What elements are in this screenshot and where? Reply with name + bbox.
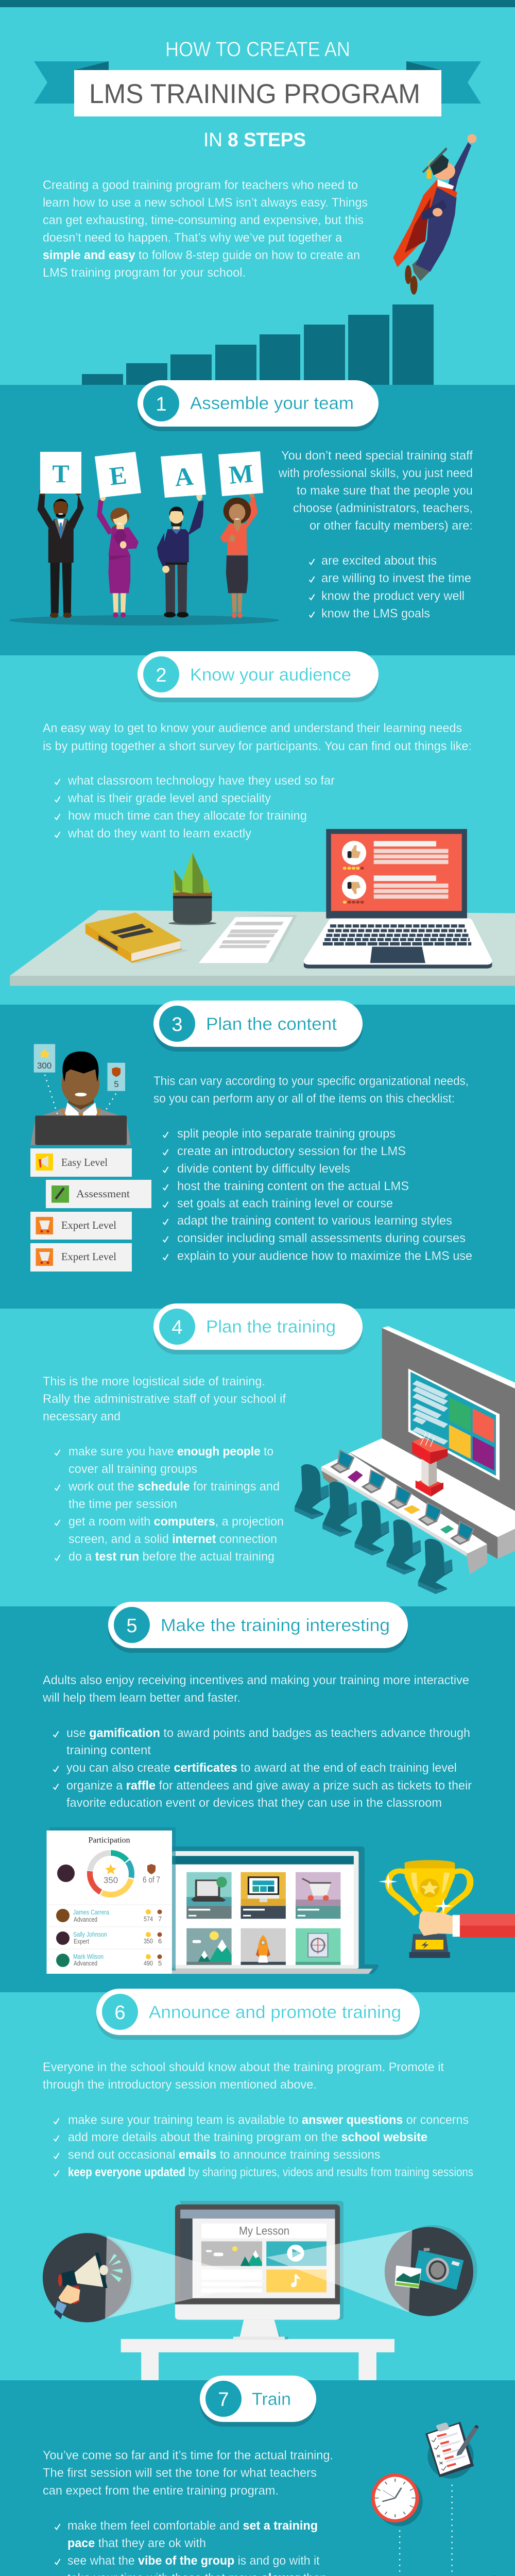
checklist: team traits: know the LMS goals	[321, 607, 430, 620]
checklist: content tasks: set goals at each training level or course	[177, 1196, 393, 1211]
checklist: team traits: know the product very well	[321, 589, 465, 603]
checklist: promotion: send out occasional emails to announce training sessions	[68, 2148, 380, 2162]
card: participation leaderboard: Advanced	[74, 1916, 97, 1923]
heading: step 5	[108, 1602, 408, 1653]
text: team description: or other faculty members) are:	[310, 519, 473, 533]
text: team description: choose (administrators, teachers,	[293, 501, 473, 515]
heading: step 3: Plan the content	[206, 1014, 337, 1034]
checklist: training	[55, 2519, 327, 2576]
chart: rising bars	[82, 304, 434, 385]
intro text: simple and easy to follow 8-step guide on how to create an	[43, 248, 360, 262]
letter cards: M	[228, 459, 254, 489]
text: team description: with professional skills, you just need	[278, 466, 473, 480]
text: audience intro: is by putting together a short survey for participants. You can find out things like:	[43, 739, 472, 753]
intro text: Creating a good training program for teachers who need to	[43, 178, 358, 192]
intro text: LMS training program for your school.	[43, 266, 246, 280]
heading: step 2: 2	[156, 665, 167, 686]
heading: step 6	[96, 1989, 420, 2040]
checklist: content tasks: explain to your audience how to maximize the LMS use	[177, 1249, 472, 1263]
heading: step 3	[153, 1001, 363, 1052]
checklist: logistics: cover all training groups	[68, 1462, 197, 1476]
heading: step 6: Announce and promote training	[149, 2003, 401, 2022]
text: content intro	[153, 1074, 469, 1106]
checklist: incentives	[54, 1726, 472, 1810]
title: HOW TO CREATE AN	[165, 38, 350, 61]
text: audience intro	[43, 721, 472, 753]
checklist: team traits	[309, 554, 471, 620]
heading: step 5: Make the training interesting	[161, 1616, 390, 1635]
course level list: Assessment	[76, 1188, 130, 1200]
heading: step 4: Plan the training	[206, 1317, 336, 1336]
checklist: promotion: add more details about the training program on the school website	[68, 2130, 427, 2144]
illustration: student with points and badges: 5	[114, 1079, 119, 1089]
text: team description: to make sure that the people you	[297, 484, 473, 498]
checklist: content tasks: host the training content on the actual LMS	[177, 1179, 409, 1193]
checklist: incentives: use gamification to award points and badges as teachers advance through	[66, 1726, 470, 1740]
card: participation leaderboard: Advanced	[74, 1959, 97, 1967]
checklist: content tasks: adapt the training content to various learning styles	[177, 1214, 452, 1228]
card: participation leaderboard: Sally Johnson	[73, 1930, 107, 1938]
checklist: survey questions: what do they want to learn exactly	[67, 827, 251, 841]
checklist: promotion: keep everyone updated by sharing pictures, videos and results from training sessions	[68, 2165, 473, 2179]
card: participation leaderboard: 6	[158, 1937, 162, 1945]
checklist: team traits: are willing to invest the time	[321, 571, 471, 585]
intro text: can get exhausting, time-consuming and expensive, but this	[43, 213, 364, 227]
checklist: promotion	[54, 2113, 473, 2179]
checklist: logistics: do a test run before the actual training	[68, 1550, 274, 1564]
card: participation leaderboard: 6 of 7	[143, 1875, 160, 1885]
course level list: Expert Level	[61, 1250, 116, 1263]
checklist: logistics: work out the schedule for trainings and	[68, 1480, 280, 1494]
intro text: learn how to use a new school LMS isn’t always easy. Things	[43, 196, 368, 210]
checklist: team traits: are excited about this	[321, 554, 437, 568]
text: incentives intro: Adults also enjoy receiving incentives and making your training more interactive	[43, 1673, 469, 1687]
checklist: incentives: you can also create certificates to award at the end of each training level	[66, 1761, 457, 1775]
checklist: training: make them feel comfortable and set a training	[67, 2519, 318, 2533]
text: promotion intro: through the introductory session mentioned above.	[43, 2078, 317, 2092]
panel: step 5 make the training interesting	[0, 1602, 515, 1993]
panel: step 6 announce and promote training	[0, 1989, 515, 2383]
card: participation leaderboard	[46, 1827, 176, 1974]
title	[34, 38, 481, 151]
checklist: logistics: the time per session	[68, 1497, 177, 1511]
illustration: flying graduate	[393, 134, 476, 295]
heading: step 1: 1	[156, 394, 167, 415]
panel: step 7 train	[0, 2376, 515, 2576]
illustration: laptop with course tiles	[172, 1846, 379, 1974]
illustration: isometric classroom	[295, 1326, 515, 1594]
checklist: survey questions: what classroom technology have they used so far	[67, 774, 335, 788]
course level list	[30, 1148, 151, 1272]
checklist: training: see what the vibe of the group is and go with it	[67, 2554, 320, 2568]
letter cards: E	[108, 460, 128, 491]
illustration: desk with book, plant, survey and laptop	[10, 829, 515, 986]
letter cards: A	[174, 462, 195, 492]
text: content intro: This can vary according to your specific organizational needs,	[153, 1074, 469, 1088]
text: incentives intro	[42, 1673, 469, 1705]
heading: step 4	[153, 1303, 363, 1354]
card: participation leaderboard: Expert	[74, 1937, 89, 1945]
text: training intro: You’ve come so far and it’s time for the actual training.	[43, 2448, 333, 2463]
letter cards	[40, 451, 263, 498]
text: incentives intro: will help them learn better and faster.	[42, 1691, 241, 1705]
card: participation leaderboard: Mark Wilson	[73, 1953, 104, 1960]
course level list: Easy Level	[61, 1156, 108, 1168]
course level list: Expert Level	[61, 1219, 116, 1231]
checklist: logistics: make sure you have enough people to	[68, 1445, 273, 1459]
text: promotion intro: Everyone in the school should know about the training program. Promote it	[43, 2060, 444, 2074]
heading: step 4: 4	[171, 1317, 183, 1338]
heading: step 1	[138, 380, 379, 431]
card: participation leaderboard: James Carrera	[73, 1908, 110, 1916]
checklist: content tasks: split people into separate training groups	[177, 1127, 396, 1141]
title: IN 8 STEPS	[203, 129, 306, 151]
heading: step 5: 5	[126, 1615, 138, 1637]
panel: step 4 plan the training	[0, 1303, 515, 1606]
heading: step 3: 3	[171, 1014, 183, 1036]
text: logistics intro: This is the more logistical side of training.	[43, 1375, 265, 1388]
text: training intro: The first session will set the tone for what teachers	[43, 2466, 317, 2480]
checklist: survey questions: how much time can they allocate for training	[68, 809, 307, 823]
text: audience intro: An easy way to get to know your audience and understand their learning needs	[43, 721, 462, 735]
checklist: content tasks: consider including small assessments during courses	[177, 1231, 466, 1245]
illustration: trophy held by hand	[379, 1860, 515, 1958]
text: team description: You don’t need special training staff	[281, 449, 473, 463]
illustration: student with points and badges	[30, 1044, 131, 1145]
panel: step 1 assemble your team	[0, 380, 515, 655]
checklist: incentives: training content	[66, 1743, 151, 1757]
illustration: desktop monitor on desk with megaphone and camera: My Lesson	[239, 2225, 289, 2237]
intro text: doesn’t need to happen. That’s why we’ve put together a	[43, 231, 342, 245]
heading: step 7	[200, 2376, 316, 2427]
letter cards: T	[52, 459, 70, 488]
chart: participation donut	[90, 1853, 132, 1895]
checklist: incentives: organize a raffle for attendees and give away a prize such as tickets to their	[66, 1778, 472, 1793]
heading: step 6: 6	[114, 2002, 126, 2024]
checklist: content tasks: create an introductory session for the LMS	[177, 1144, 406, 1158]
heading: step 2: Know your audience	[190, 665, 351, 685]
panel: header with title and intro	[0, 0, 515, 386]
heading: step 7: 7	[218, 2389, 229, 2411]
text: logistics intro	[43, 1375, 286, 1423]
illustration: team holding letter cards	[9, 451, 279, 625]
heading: step 7: Train	[252, 2389, 291, 2409]
illustration: trainer with clock, checklist, screen and audience	[249, 2422, 501, 2576]
panel: step 3 plan the content	[0, 1001, 515, 1309]
card: participation leaderboard: 7	[158, 1915, 162, 1923]
checklist: survey questions	[55, 774, 335, 841]
card: participation leaderboard: 350	[144, 1937, 153, 1945]
checklist: survey questions: what is their grade level and speciality	[67, 791, 271, 805]
text: logistics intro: necessary and	[43, 1410, 121, 1423]
checklist: promotion: make sure your training team is available to answer questions or concerns	[68, 2113, 469, 2127]
checklist: logistics: screen, and a solid internet connection	[68, 1532, 277, 1546]
checklist: logistics	[55, 1445, 284, 1564]
heading: step 1: Assemble your team	[190, 394, 354, 413]
checklist: logistics: get a room with computers, a projection	[68, 1515, 284, 1529]
text: logistics intro: Rally the administrative staff of your school if	[43, 1392, 286, 1406]
card: participation leaderboard: 574	[144, 1915, 153, 1923]
text: promotion intro	[43, 2060, 444, 2092]
card: participation leaderboard: 5	[158, 1959, 162, 1967]
ribbon banner	[34, 61, 481, 116]
checklist: training: pace that they are ok with	[67, 2536, 206, 2550]
text: content intro: so you can perform any or all of the items on this checklist:	[153, 1092, 455, 1106]
intro text	[43, 178, 368, 280]
checklist: content tasks	[163, 1127, 472, 1263]
card: participation leaderboard: Participation	[89, 1836, 130, 1844]
text: training intro: can expect from the entire training program.	[43, 2484, 279, 2498]
panel: step 2 know your audience	[0, 651, 515, 1005]
illustration: student with points and badges: 300	[37, 1061, 52, 1071]
text: training intro	[43, 2448, 333, 2498]
ribbon banner: LMS TRAINING PROGRAM	[89, 79, 420, 109]
checklist: content tasks: divide content by difficulty levels	[177, 1162, 350, 1176]
checklist: incentives: favorite education event or devices that they can use in the classroom	[66, 1796, 442, 1810]
text: team description	[278, 449, 473, 533]
illustration: desktop monitor on desk with megaphone and camera	[43, 2201, 477, 2383]
card: participation leaderboard: 350	[104, 1875, 118, 1885]
card: participation leaderboard: 490	[144, 1959, 153, 1967]
heading: step 2	[138, 651, 379, 702]
